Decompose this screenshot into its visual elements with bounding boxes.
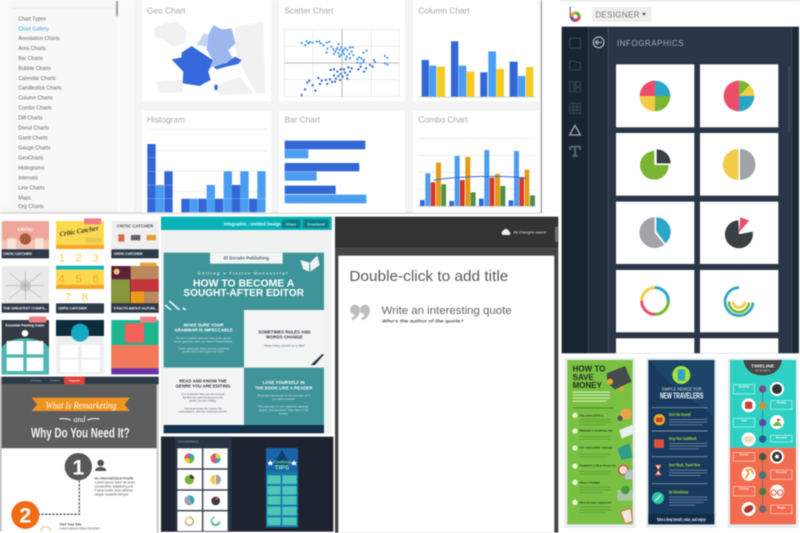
infographic: new travelers: Be Adventurous — [669, 489, 689, 494]
card: combo chart — [413, 111, 539, 213]
chart types sidebar: Intervals — [18, 175, 38, 181]
chart types sidebar: Area Charts — [18, 46, 46, 52]
chart types sidebar: Candlestick Charts — [18, 86, 62, 92]
main heading: Why Do You Need It? — [31, 425, 130, 441]
editor top bar: Infographic - Untitled Design — [224, 221, 281, 226]
thumbnail: 5 facts about autumn — [111, 263, 159, 313]
poster header: SOUGHT-AFTER EDITOR — [183, 288, 304, 299]
poster section: grammar: books and review grammar rules. — [183, 350, 225, 354]
infographic: timeline of sports: Rugby — [777, 505, 786, 509]
thumbnail: the greatest composers — [2, 266, 49, 313]
tips poster: Cooking — [273, 459, 291, 464]
thumbnail: green and coral — [111, 317, 159, 374]
step 1 text — [95, 477, 136, 496]
card: scatter chart — [279, 0, 405, 101]
thumbnail: 5 facts about autumn: 5 FACTS ABOUT AUTUM... — [114, 305, 157, 310]
step 1 text: consectetur adipiscing elit. — [95, 484, 134, 488]
ribbon title: What Is Remarketing — [46, 401, 117, 411]
poster section: grammar: No one is perfect and you may come across — [176, 336, 232, 340]
poster header: Editing a Fiction Manuscript — [198, 271, 289, 276]
thumbnail: critic catcher yellow: 4 5 6 — [59, 273, 99, 285]
pie: half yellow half gray — [723, 149, 755, 180]
shape cards — [616, 64, 778, 353]
chart types sidebar: Combo Charts — [18, 106, 52, 112]
step 2 marker: 2 — [19, 504, 31, 528]
infographic: timeline of sports: Running — [776, 470, 787, 474]
poster section: lose yourself — [244, 368, 324, 425]
infographic: how to save money: Set reasonable savings — [579, 446, 613, 450]
donut: four segments — [642, 288, 668, 314]
card: geo chart — [142, 0, 271, 101]
card: bar chart: Bar Chart — [284, 115, 321, 125]
infographic: new travelers: Don't Be Scared — [669, 412, 691, 417]
thumbnail: critic catcher yellow — [56, 218, 104, 313]
chart types sidebar: Diff Charts — [18, 116, 43, 122]
thumbnail: critic catcher pink: CRITIC — [18, 227, 34, 232]
panel: Google chart gallery — [0, 0, 542, 214]
editor top bar — [161, 217, 332, 230]
infographic: new travelers: Drop Your Guidebook — [669, 436, 697, 441]
chart types sidebar: Gantt Charts — [18, 136, 48, 142]
poster section: rules change: SOMETIMES RULES AND — [258, 329, 310, 334]
pie: gray with blue slice — [639, 217, 671, 248]
chart types sidebar: Calendar Charts — [18, 76, 56, 82]
panel: designer with tips poster: INFOGRAPHICS — [178, 440, 198, 444]
chart types sidebar: Chart Types — [18, 16, 46, 22]
step 1 text: neque molestie tempor. — [95, 492, 129, 496]
infographic: timeline of sports: Golf — [741, 418, 747, 422]
poster section: grammar: some grammar rules you haven't heard before. — [174, 339, 233, 343]
thumbnail: critic catcher gray: CRITIC CATCHER — [114, 251, 143, 256]
poster section: lose yourself: THE BOOK LIKE A READER — [255, 385, 313, 390]
poster header: HOW TO BECOME A — [193, 278, 294, 289]
thumbnail: the greatest composers: THE GREATEST COMPS... — [3, 305, 47, 310]
quote text: Write an interesting quote — [382, 305, 512, 317]
tips poster: TIPS — [275, 464, 290, 471]
infographic: new travelers: NEW TRAVELERS — [660, 392, 704, 401]
poster section: genre: You must know the tropes, the — [184, 406, 222, 410]
poster section: genre: It is important that you are not just — [182, 392, 225, 396]
infographic: how to save money: SAVE — [573, 373, 594, 382]
step 1 marker: 1 — [72, 455, 84, 479]
poster section: grammar: This is when you bring out your grammar — [178, 346, 229, 350]
step 1 text: An Interest/Client Profile — [95, 477, 134, 481]
infographic: how to save money: Establish a New Home for — [579, 464, 617, 468]
infographic: how to save money: Keep a budget — [579, 480, 600, 484]
thumbnail: critic catcher yellow: CRITIC CATCHER — [58, 306, 87, 311]
poster section: grammar — [164, 310, 244, 368]
chart types sidebar: Line Charts — [18, 185, 45, 191]
step 1 marker — [65, 453, 92, 480]
chart types sidebar: Histograms — [18, 165, 45, 171]
thumbnail: critic catcher yellow: 7 8 — [65, 292, 88, 304]
infographic: timeline of sports: Baseball — [776, 436, 787, 440]
step 2 text — [59, 523, 100, 531]
poster section: rules change — [244, 310, 324, 368]
chart types sidebar: Chart Gallery — [18, 26, 49, 32]
heading: infographics: INFOGRAPHICS — [617, 39, 684, 48]
nav bar: Upgrade — [69, 379, 80, 383]
card: column chart: Column Chart — [418, 6, 470, 16]
chart types sidebar: Gauge Charts — [18, 146, 51, 152]
pie: dark with red wedge — [725, 217, 753, 248]
card: scatter chart: Scatter Chart — [284, 6, 334, 16]
step 2 marker — [11, 501, 39, 529]
poster section: lose yourself: Pay attention to your reactions: feelings, — [258, 405, 309, 409]
status text: All changes saved — [513, 231, 546, 235]
infographic: new travelers: SIMPLE ADVICE FOR — [662, 386, 702, 392]
chart types sidebar: Bar Charts — [18, 56, 43, 62]
step 2 text: Visit Your Site — [59, 523, 82, 527]
tips poster — [266, 448, 298, 527]
poster section: lose yourself: review. — [279, 411, 288, 415]
small pies — [184, 453, 221, 526]
"and" — [59, 415, 99, 424]
nav bar — [2, 377, 159, 384]
ribbon title — [32, 398, 130, 411]
pie: half and slices — [724, 81, 754, 111]
poster section: rules change: WORDS CHANGE — [266, 334, 303, 339]
card: combo chart: Combo Chart — [418, 115, 469, 125]
nav bar: Preview — [31, 379, 42, 383]
icon: logo — [570, 7, 581, 22]
donut: concentric arcs — [725, 288, 753, 316]
thumbnail: critic catcher yellow: 1 2 3 — [59, 253, 99, 265]
step 1 text: Lorem ipsum dolor sit amet, — [95, 481, 136, 485]
editor top bar: Download — [307, 221, 325, 226]
thumbnail: teal circle statistics — [56, 320, 104, 374]
small cards — [177, 448, 228, 531]
designer button: DESIGNER — [595, 10, 640, 19]
infographic: new travelers — [646, 358, 717, 528]
panel: slides editor with quote — [335, 217, 558, 533]
panel: designer with tips poster — [161, 437, 333, 532]
chart types sidebar: Donut Charts — [18, 126, 49, 132]
icon: step 2 arc — [41, 527, 51, 532]
thumbnail: essential packing guide: Essential Packing Guide — [6, 324, 44, 328]
slide card — [338, 256, 554, 533]
poster section: grammar: GRAMMAR IS IMPECCABLE — [175, 327, 233, 332]
icon: person — [95, 460, 106, 471]
poster section: lose yourself: LOSE YOURSELF IN — [263, 380, 305, 385]
infographic: timeline of sports: Cycling — [739, 487, 749, 491]
infographic: timeline of sports: Soccer — [740, 453, 748, 457]
icon: back arrow — [593, 37, 604, 48]
chart types sidebar: Column Charts — [18, 96, 53, 102]
poster section: genre: READ AND KNOW THE — [179, 379, 227, 384]
panel: infographic editor, how to become a sought-after editor — [161, 217, 332, 433]
poster header — [164, 253, 324, 314]
poster section: genre: familiar but well-immersed in the — [183, 395, 224, 399]
icon: cloud saved — [502, 229, 510, 235]
step 1 text: Fusce mollis urna ultricies — [95, 488, 133, 492]
step 2 text: Lorem ipsum dolor sit amet, — [59, 527, 100, 531]
poster section: rules change: Always keep yourself up to date! — [264, 343, 305, 347]
card: histogram — [142, 111, 271, 213]
editor background — [562, 27, 799, 353]
infographic: how to save money: HOW TO — [573, 365, 605, 374]
dashed connector — [38, 480, 79, 514]
poster section: lose yourself: Read the manuscript for the first time as if — [257, 394, 310, 398]
slide title: Double-click to add title — [349, 268, 508, 285]
chart types sidebar: Bubble Charts — [18, 66, 51, 72]
poster section: grammar: MAKE SURE YOUR — [184, 322, 224, 327]
infographic: timeline of sports: Bowling — [739, 385, 750, 389]
thumbnail: essential packing guide — [2, 317, 49, 374]
infographic: how to save money — [565, 358, 635, 528]
tool icons — [570, 38, 580, 156]
poster section: genre — [164, 368, 244, 425]
infographic: timeline of sports — [728, 358, 798, 528]
chart types sidebar — [12, 0, 118, 210]
thumbnail: critic catcher pink: CRITIC CATCHER — [3, 251, 32, 256]
editor top bar: Share — [286, 221, 297, 226]
thumbnail: critic catcher gray: CRITIC CATCHER — [117, 223, 154, 228]
infographic: timeline of sports: Boxing — [777, 401, 786, 405]
card: bar chart — [279, 111, 405, 213]
chart types sidebar: Org Charts — [18, 204, 44, 210]
infographic: how to save money: Record your expenses — [579, 500, 612, 504]
chart types sidebar: GeoCharts — [18, 155, 44, 161]
poster section: lose yourself: you were a reader. — [272, 397, 296, 401]
thumbnail: critic catcher gray — [111, 221, 159, 258]
"and": and — [73, 415, 86, 424]
poster section: genre: expectations, and the loved plot points. — [179, 410, 228, 414]
chart types sidebar: Maps — [18, 195, 31, 201]
infographic: new travelers: Take a deep breath, relax, and enjoy! — [657, 517, 706, 522]
thumbnail: critic catcher yellow: Critic Catcher — [59, 224, 99, 238]
infographic: how to save money: Maintain a working rate — [579, 429, 613, 433]
infographic: new travelers: Don't Rush, Travel Slow — [669, 462, 700, 467]
quote author: Who's the author of the quote? — [382, 318, 464, 323]
poster section: lose yourself: doubts, and questions. Note them in the — [259, 408, 309, 412]
pie: four quadrants — [640, 81, 670, 111]
designer button — [592, 7, 652, 22]
poster section: genre: GENRE YOU ARE EDITING — [176, 384, 231, 389]
card: histogram: Histogram — [147, 115, 185, 125]
infographic: how to save money: MONEY — [573, 381, 603, 390]
panel: remarketing infographic — [0, 377, 159, 533]
card: column chart — [413, 0, 539, 101]
panel: template gallery thumbnails — [2, 218, 159, 374]
poster header: El Dorado Publishing — [224, 256, 269, 261]
poster section: genre: genre you are editing. — [189, 399, 217, 403]
chart types sidebar: Annotation Charts — [18, 36, 60, 42]
thumbnail: critic catcher pink — [2, 221, 49, 258]
icon: quote marks — [350, 305, 370, 320]
infographic: how to save money: Pay yourself first — [579, 413, 604, 417]
panel: sample infographics — [565, 358, 798, 528]
card: geo chart: Geo Chart — [147, 6, 186, 16]
infographic: timeline of sports: TIMELINE — [751, 363, 775, 369]
panel: designer infographics picker — [560, 0, 800, 353]
infographic: timeline of sports: OF SPORTS — [755, 368, 771, 372]
pie: three quarters with exploded slice — [640, 149, 671, 180]
nav bar: Publish — [50, 379, 60, 383]
